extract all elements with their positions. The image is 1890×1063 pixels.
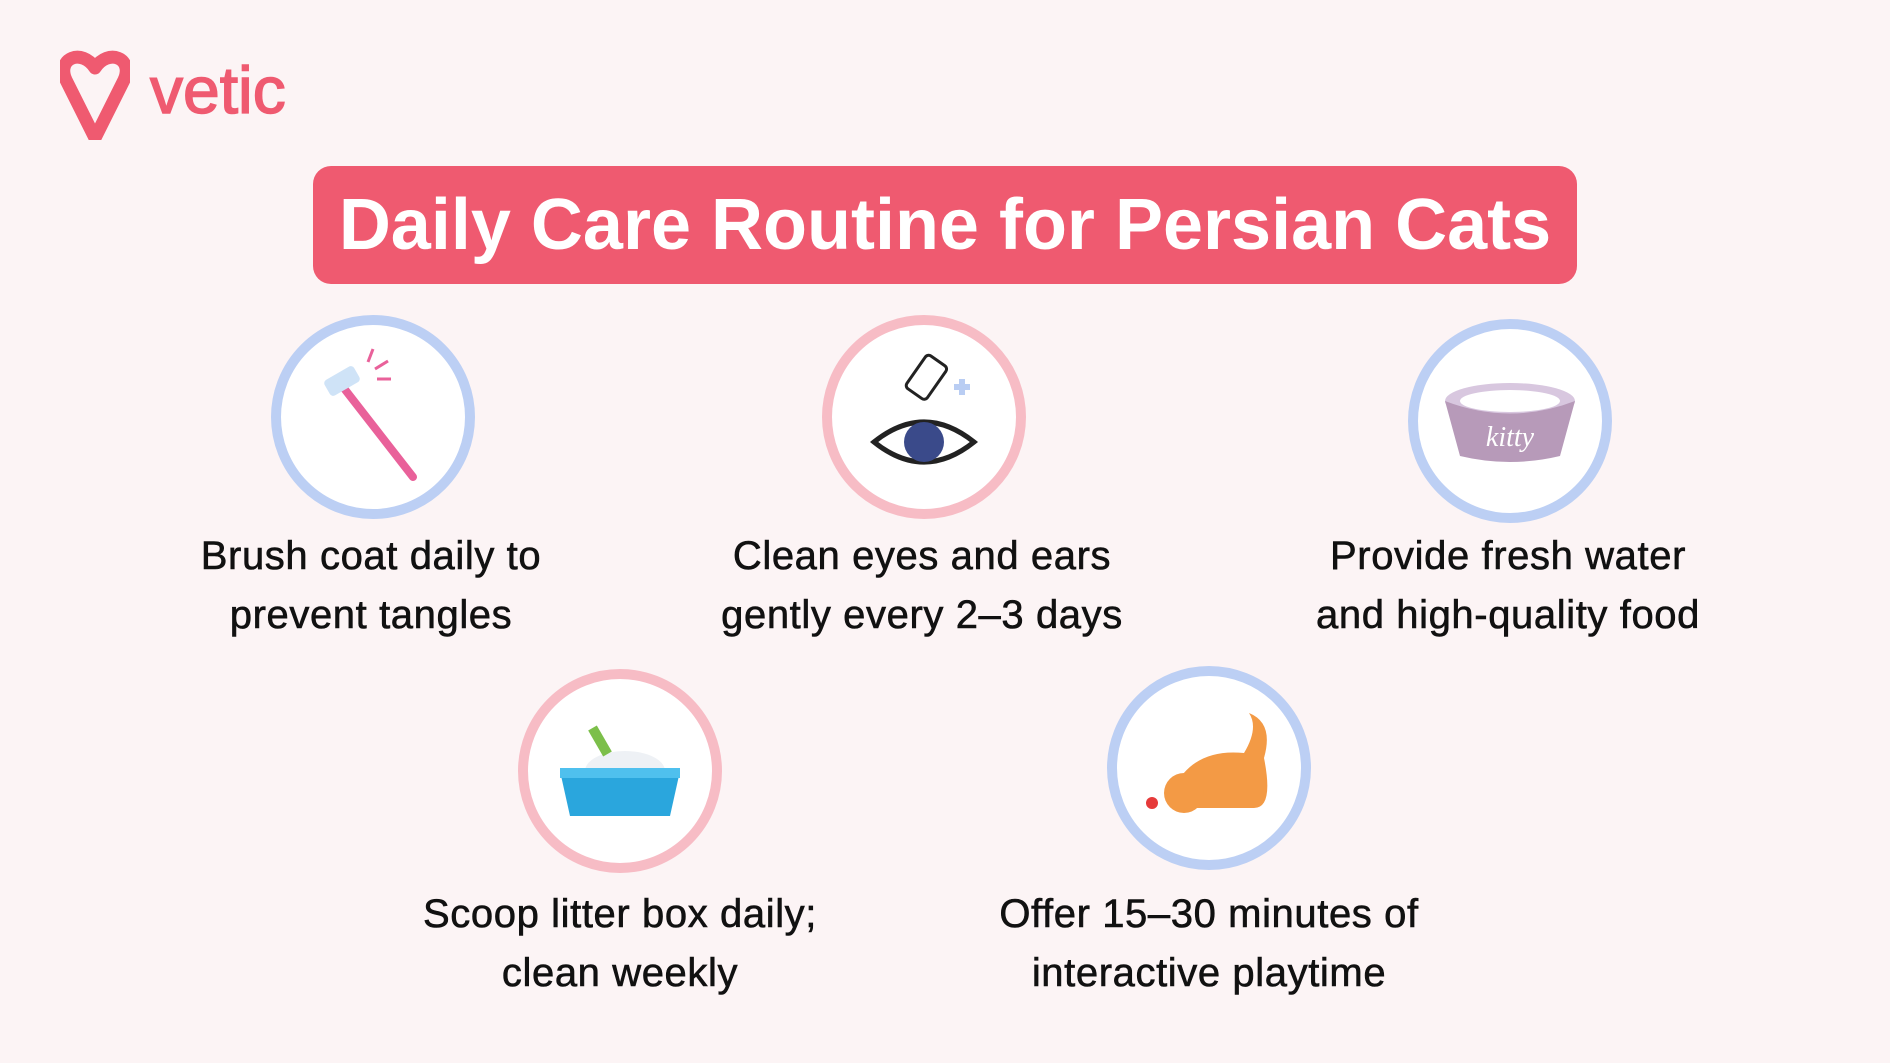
icon: bowl [1408,319,1612,523]
text: brush: prevent tangles [230,593,512,637]
text: litter: Scoop litter box daily; [423,892,817,936]
icon: heart V [60,50,130,140]
logo [60,50,286,140]
text: litter: clean weekly [502,951,738,995]
icon: toothbrush [271,315,475,519]
text: food [1316,534,1700,637]
icon: eye drop [822,315,1026,519]
text: litter [423,892,817,995]
title [313,166,1577,284]
text: playtime: interactive playtime [1032,951,1386,995]
icon: bowl: kitty [1486,422,1535,453]
text: playtime: Offer 15–30 minutes of [999,892,1419,936]
text: food: Provide fresh water [1330,534,1686,578]
logo text: vetic [150,53,286,127]
text: eyes: gently every 2–3 days [721,593,1123,637]
text: food: and high-quality food [1316,593,1700,637]
text: eyes [721,534,1123,637]
text: eyes: Clean eyes and ears [733,534,1111,578]
title: Daily Care Routine for Persian Cats [339,185,1551,265]
text: brush: Brush coat daily to [201,534,541,578]
icon: litter box [518,669,722,873]
text: brush [201,534,541,637]
icon: cat [1107,666,1311,870]
text: playtime [999,892,1419,995]
